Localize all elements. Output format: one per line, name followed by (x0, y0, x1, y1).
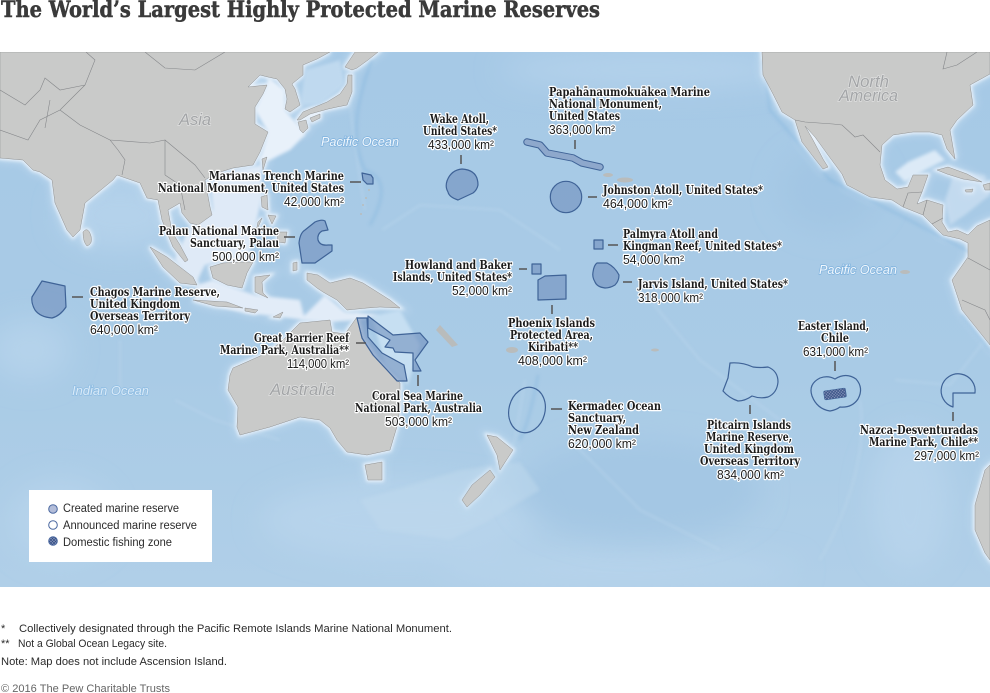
label: Easter Island: Easter Island, (798, 319, 869, 333)
label: Papahanaumokuakea (549, 85, 710, 137)
footnotes: * (1, 623, 6, 635)
label: Nazca-Desventuradas (860, 423, 979, 463)
continent label: North America: America (838, 86, 898, 105)
country borders (0, 52, 990, 320)
label: Palmyra and Kingman: 54,000 km² (623, 253, 684, 267)
ocean ridges (120, 60, 985, 560)
label: Marianas Trench (158, 169, 344, 209)
label: Howland and Baker: Howland and Baker (405, 258, 513, 272)
label: Palmyra and Kingman: Palmyra Atoll and (623, 227, 718, 241)
label: Papahanaumokuakea: National Monument, (549, 97, 662, 111)
legend marker: fishing zone: Domestic fishing zone (63, 537, 172, 549)
label: Palmyra and Kingman: Kingman Reef, United States* (623, 239, 783, 253)
reserve: Wake Atoll (423, 112, 498, 200)
label: Pitcairn: 834,000 km² (717, 468, 784, 482)
label: Johnston Atoll (602, 183, 764, 211)
label: Great Barrier Reef (220, 331, 350, 371)
label: Kermadec (568, 399, 661, 451)
continent label: Asia: Asia (178, 110, 211, 129)
label: Kermadec: New Zealand (568, 423, 639, 437)
label: Howland and Baker: Islands, United States* (393, 270, 513, 284)
reserve: Palmyra and Kingman (594, 227, 783, 267)
label: Great Barrier Reef: 114,000 km² (287, 357, 349, 371)
islands (360, 173, 910, 353)
map background (0, 52, 990, 587)
label: Kermadec: Sanctuary, (568, 411, 626, 425)
label: Coral Sea (355, 389, 482, 429)
label: Phoenix Islands: Protected Area, (510, 328, 593, 342)
label: Wake Atoll (423, 112, 498, 152)
footnotes: Collectively designated through the Pacific Remote Islands Marine National Monument. (19, 623, 452, 635)
label: Pitcairn: Overseas Territory (700, 454, 801, 468)
label: Palau: Sanctuary, Palau (190, 236, 279, 250)
label: Phoenix Islands: 408,000 km² (518, 354, 587, 368)
continent label: North America: North (848, 72, 889, 91)
label: Papahanaumokuakea: Papahānaumokuākea Marine (549, 85, 710, 99)
shallow seas (175, 60, 990, 540)
label: Papahanaumokuakea: United States (549, 109, 620, 123)
footnotes: Not a Global Ocean Legacy site. (18, 638, 167, 650)
label: Jarvis Island (637, 277, 789, 305)
label: Marianas Trench: National Monument, United States (158, 181, 344, 195)
label: Marianas Trench: Marianas Trench Marine (209, 169, 344, 183)
label: Jarvis Island: Jarvis Island, United States* (637, 277, 789, 291)
label: Jarvis Island: 318,000 km² (638, 291, 703, 305)
label: Palau (159, 224, 279, 264)
label: Kermadec: Kermadec Ocean (568, 399, 661, 413)
legend marker: created: Created marine reserve (63, 503, 179, 515)
label: Chagos: United Kingdom (90, 297, 180, 311)
label: Wake Atoll: Wake Atoll, (429, 112, 489, 126)
label: Chagos (90, 285, 220, 337)
label: Nazca-Desventuradas: 297,000 km² (914, 449, 979, 463)
reserve: Pitcairn (700, 363, 801, 482)
ocean label: Pacific Ocean east: Pacific Ocean (819, 262, 897, 277)
label: Coral Sea: Coral Sea Marine (372, 389, 463, 403)
label: Palmyra and Kingman (623, 227, 783, 267)
label: Chagos: 640,000 km² (90, 323, 158, 337)
label: Papahanaumokuakea: 363,000 km² (549, 123, 615, 137)
reserve: Phoenix Islands (508, 275, 595, 368)
label: Howland and Baker (393, 258, 513, 298)
footnotes: ** (1, 638, 10, 650)
label: Palau: 500,000 km² (212, 250, 279, 264)
reserve: Jarvis Island (593, 263, 789, 305)
reserve: Nazca-Desventuradas (860, 374, 979, 463)
reserve: Great Barrier Reef (220, 318, 407, 381)
label: Easter Island: 631,000 km² (803, 345, 868, 359)
ocean label: Pacific Ocean west: Pacific Ocean (321, 134, 399, 149)
label: Great Barrier Reef: Marine Park, Australia** (220, 343, 350, 357)
label: Coral Sea: 503,000 km² (385, 415, 452, 429)
reserve: Easter Island (798, 319, 869, 411)
label: Marianas Trench: 42,000 km² (284, 195, 344, 209)
label: Howland and Baker: 52,000 km² (452, 284, 512, 298)
land masses (0, 52, 990, 560)
ocean label: Indian Ocean: Indian Ocean (72, 383, 149, 398)
label: Coral Sea: National Park, Australia (355, 401, 482, 415)
reserve: Marianas Trench (158, 169, 373, 209)
footnotes: Note: Map does not include Ascension Island. (1, 656, 227, 668)
label: Pitcairn: Marine Reserve, (706, 430, 792, 444)
reserve: Howland and Baker (393, 258, 541, 298)
label: Pitcairn: United Kingdom (704, 442, 794, 456)
label: Kermadec: 620,000 km² (568, 437, 636, 451)
label: Great Barrier Reef: Great Barrier Reef (254, 331, 350, 345)
reserve: Papahanaumokuakea (527, 85, 710, 167)
label: Chagos: Chagos Marine Reserve, (90, 285, 220, 299)
footnotes (1, 623, 452, 668)
reserve: Palau (159, 220, 332, 264)
reserve: Chagos (32, 281, 220, 337)
label: Easter Island: Chile (821, 331, 849, 345)
label: Pitcairn (700, 418, 801, 482)
label: Wake Atoll: 433,000 km² (428, 138, 494, 152)
label: Phoenix Islands: Phoenix Islands (508, 316, 595, 330)
label: Johnston Atoll: 464,000 km² (603, 197, 672, 211)
legend marker: announced: Announced marine reserve (63, 520, 197, 532)
label: Easter Island (798, 319, 869, 359)
continent label: Australia: Australia (269, 380, 335, 399)
label: Chagos: Overseas Territory (90, 309, 191, 323)
legend (29, 490, 212, 562)
label: Pitcairn: Pitcairn Islands (707, 418, 791, 432)
reserve: Coral Sea (355, 316, 482, 429)
reserve: Johnston Atoll (550, 181, 764, 213)
label: Johnston Atoll: Johnston Atoll, United States* (602, 183, 764, 197)
continent label: North America (838, 72, 898, 105)
reserve: Kermadec (504, 383, 661, 451)
label: Phoenix Islands: Kiribati** (528, 340, 579, 354)
label: Palau: Palau National Marine (159, 224, 279, 238)
label: Wake Atoll: United States* (423, 124, 498, 138)
label: Phoenix Islands (508, 316, 595, 368)
